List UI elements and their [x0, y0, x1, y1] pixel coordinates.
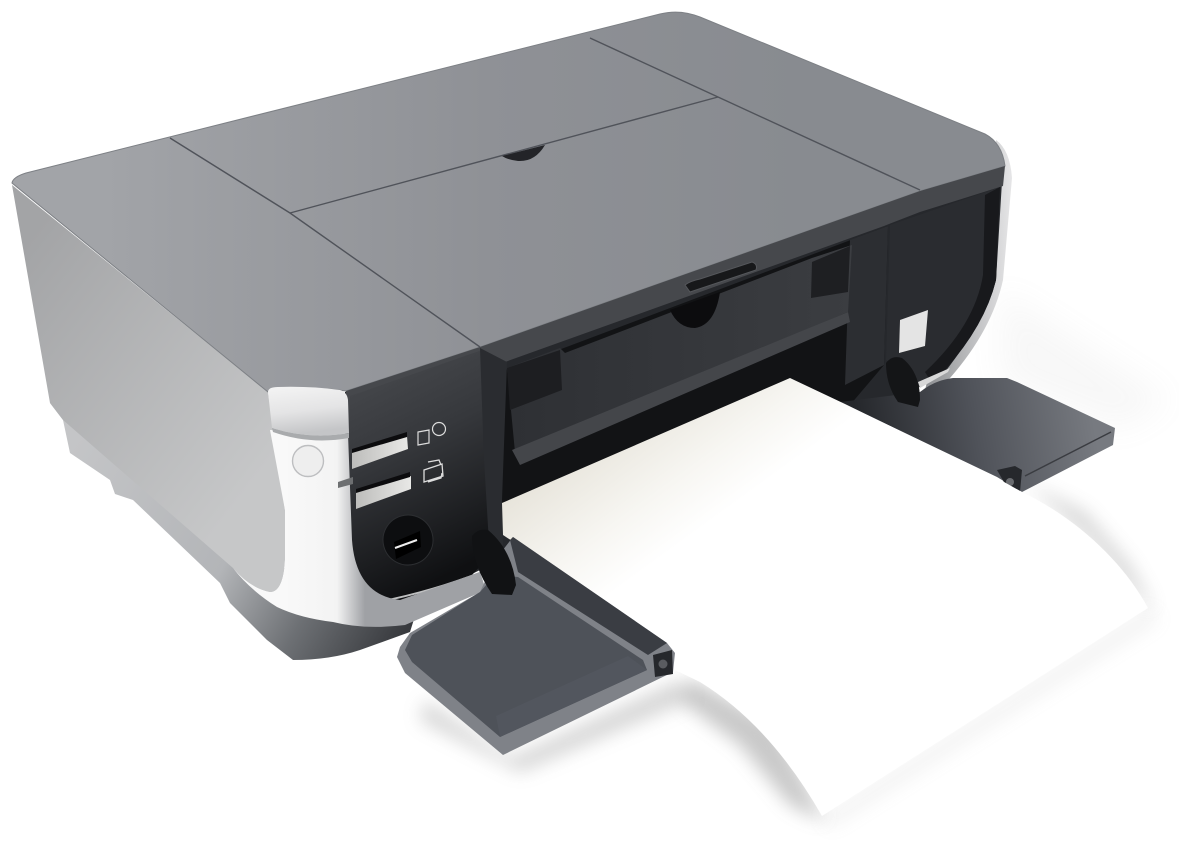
- printer front dark body: [345, 165, 1003, 600]
- icon: stop button: [432, 422, 446, 436]
- icon: printer: [424, 460, 443, 482]
- flap lower lip: [512, 312, 850, 465]
- right side compartment: [886, 187, 1000, 388]
- flap side recess right: [811, 246, 850, 298]
- tray body rim: [397, 537, 675, 755]
- left paper guide: [472, 530, 516, 595]
- tray surface: [405, 575, 647, 737]
- panel right column: [480, 348, 507, 560]
- right silver trim: [925, 140, 1012, 390]
- USB socket: [377, 509, 439, 571]
- front control panel: [348, 348, 507, 602]
- right chrome strip: [918, 368, 950, 388]
- indicator light: [338, 477, 353, 488]
- right paper tray: [840, 378, 1115, 492]
- inner flap: [507, 245, 852, 452]
- tray lower band: [496, 656, 647, 737]
- top lid surface: [12, 12, 1005, 392]
- output opening: [500, 226, 888, 505]
- white sticker: [899, 310, 928, 353]
- button 2: [356, 476, 411, 509]
- lid seams: [170, 38, 920, 347]
- tray hinge: [653, 650, 673, 677]
- tray front rim line: [1025, 432, 1111, 476]
- USB port: [394, 531, 421, 559]
- left side panel: [12, 185, 285, 592]
- icon: memory card: [418, 430, 429, 445]
- silver trim: [233, 387, 486, 627]
- silver corner cap: [268, 387, 349, 436]
- printer base: [50, 403, 420, 660]
- tray hinge: [997, 466, 1022, 492]
- power button: [292, 446, 324, 476]
- left paper tray: [397, 537, 675, 755]
- lid finger notch: [502, 145, 545, 161]
- side column: [845, 226, 888, 385]
- release latch: [685, 262, 756, 292]
- cast shadows: [420, 290, 1170, 828]
- front bezel strip: [345, 166, 1005, 470]
- paper sheet: [502, 378, 1148, 816]
- button 1: [352, 436, 408, 469]
- translucent band: [272, 428, 349, 440]
- flap side recess left: [507, 350, 562, 410]
- chrome lower strip: [378, 572, 482, 602]
- right paper guide: [886, 357, 920, 407]
- tray rail: [510, 537, 667, 655]
- flap notch: [670, 292, 720, 328]
